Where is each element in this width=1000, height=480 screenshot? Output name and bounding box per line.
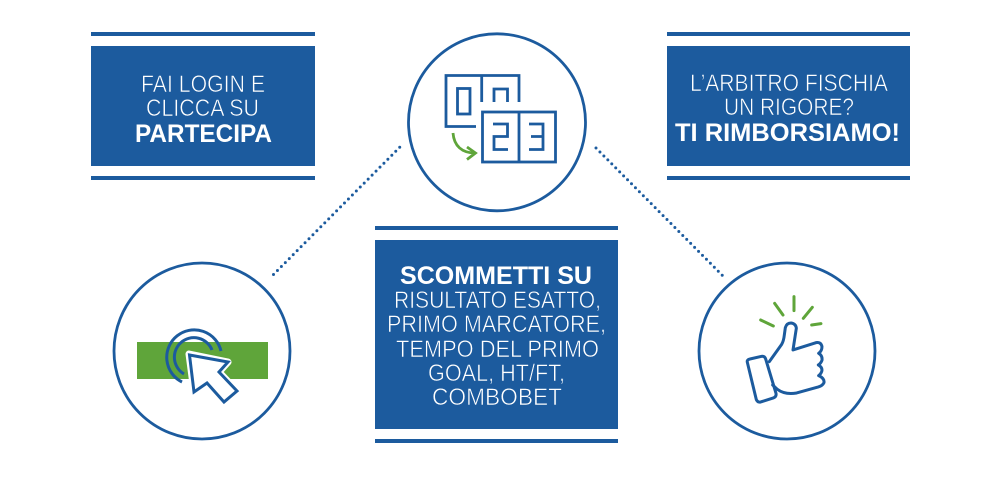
panel: bet types: RISULTATO ESATTO, — [394, 287, 601, 314]
panel: step 1 login — [91, 32, 315, 180]
panel: step 1 login: CLICCA SU — [146, 95, 259, 122]
panel: refund on penalty: L’ARBITRO FISCHIA — [690, 70, 888, 97]
icon: click on green button circle — [114, 263, 290, 439]
panel: bet types: SCOMMETTI SU — [400, 262, 592, 290]
panel: bet types: COMBOBET — [432, 384, 562, 411]
panel: refund on penalty — [667, 32, 910, 180]
panel: bet types — [375, 226, 618, 443]
dotted connector left — [274, 147, 400, 274]
panel: refund on penalty: TI RIMBORSIAMO! — [675, 119, 900, 147]
panel: step 1 login: FAI LOGIN E — [141, 71, 265, 98]
panel: refund on penalty: UN RIGORE? — [724, 94, 854, 121]
panel: step 1 login: PARTECIPA — [135, 120, 272, 148]
dotted connector right — [596, 148, 723, 276]
panel: bet types: TEMPO DEL PRIMO — [396, 336, 599, 363]
icon: scoreboard circle — [408, 34, 586, 211]
panel: bet types: GOAL, HT/FT, — [428, 360, 565, 387]
icon: thumbs up circle — [699, 263, 875, 439]
panel: bet types: PRIMO MARCATORE, — [387, 311, 606, 338]
